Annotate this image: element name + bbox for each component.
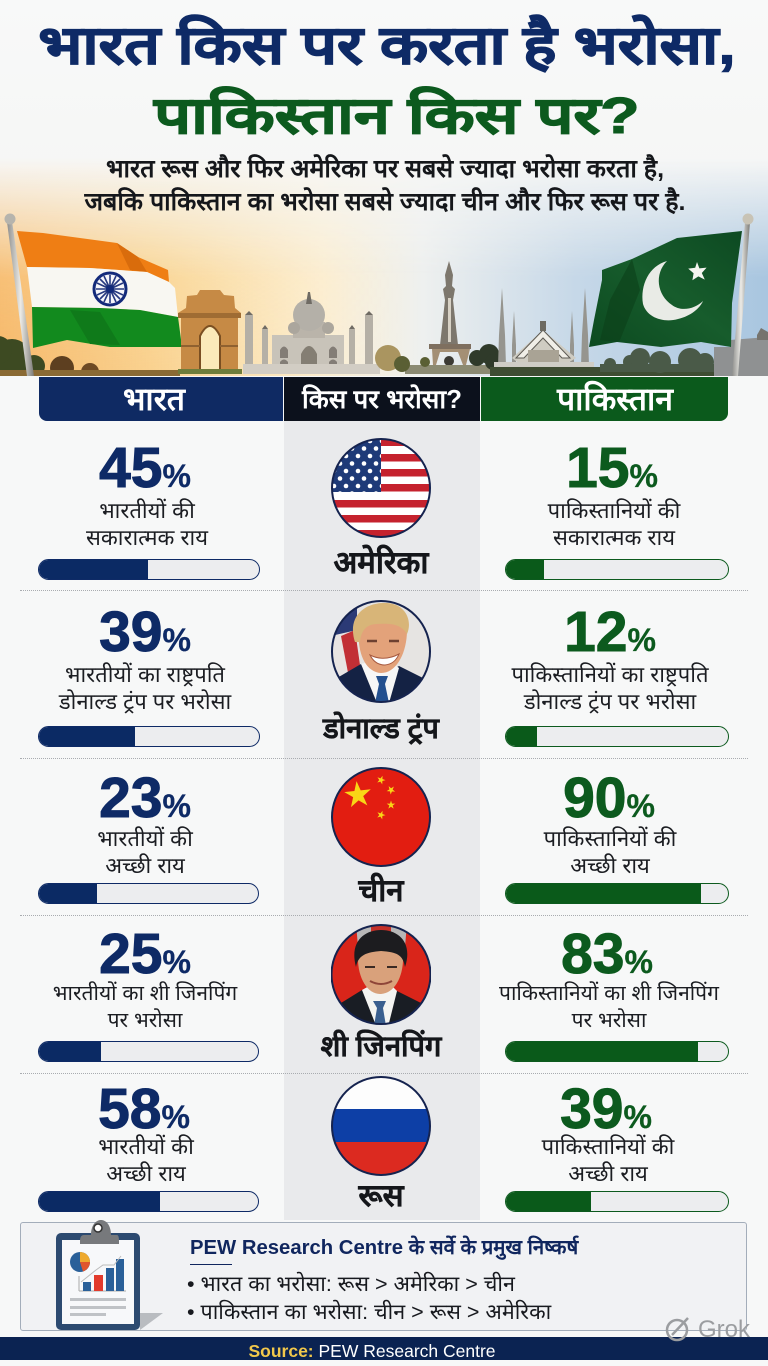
title line 2: पाकिस्तान किस पर? bbox=[154, 87, 640, 144]
findings bullets: • पाकिस्तान का भरोसा: चीन > रूस > अमेरिका bbox=[187, 1300, 551, 1324]
row 1: America bbox=[38, 436, 729, 580]
India label bbox=[58, 662, 232, 714]
source footer bbox=[0, 1337, 768, 1360]
Pakistan label: पाकिस्तानियों का राष्ट्रपति bbox=[511, 662, 709, 687]
flag: India bbox=[17, 231, 182, 348]
icon: China flag bbox=[331, 767, 431, 867]
findings bullets: • भारत का भरोसा: रूस > अमेरिका > चीन bbox=[187, 1272, 515, 1296]
person name: डोनाल्ड ट्रंप bbox=[323, 713, 439, 745]
Pakistan label: डोनाल्ड ट्रंप पर भरोसा bbox=[524, 689, 696, 714]
findings bullets bbox=[187, 1272, 552, 1324]
icon: Russia flag bbox=[331, 1076, 431, 1176]
India label: भारतीयों का शी जिनपिंग bbox=[53, 982, 237, 1005]
India 45 percent: 45% bbox=[99, 436, 191, 500]
Pakistan progress bar bbox=[505, 726, 729, 747]
Pakistan label: पाकिस्तानियों की bbox=[542, 1134, 674, 1159]
India progress bar bbox=[38, 559, 260, 580]
Pakistan label bbox=[542, 1134, 675, 1186]
Minar-e-Pakistan bbox=[405, 261, 525, 374]
Pakistan label: अच्छी राय bbox=[568, 1161, 648, 1186]
source footer: Source: PEW Research Centre bbox=[248, 1341, 496, 1361]
header: trust in whom bbox=[284, 377, 480, 421]
Pakistan label: पर भरोसा bbox=[572, 1009, 646, 1032]
person name: शी जिनपिंग bbox=[321, 1031, 441, 1063]
Pakistan label bbox=[511, 662, 709, 714]
India Gate bbox=[178, 290, 242, 374]
country name: रूस bbox=[358, 1178, 404, 1213]
Pakistan label: सकारात्मक राय bbox=[553, 525, 675, 550]
subtitle: भारत रूस और फिर अमेरिका पर सबसे ज्यादा भरोसा करता है, bbox=[106, 155, 664, 183]
India label: अच्छी राय bbox=[106, 1161, 186, 1186]
watermark: Grok: Grok bbox=[698, 1316, 750, 1343]
title line 1: भारत किस पर करता है भरोसा, bbox=[38, 16, 736, 76]
portrait: Xi Jinping bbox=[331, 924, 431, 1025]
watermark: Grok bbox=[666, 1316, 750, 1343]
Pakistan label: पाकिस्तानियों की bbox=[548, 498, 680, 523]
India label: भारतीयों का राष्ट्रपति bbox=[65, 662, 225, 687]
subtitle bbox=[84, 154, 685, 216]
India label: सकारात्मक राय bbox=[86, 525, 208, 550]
Pakistan progress bar bbox=[505, 559, 729, 580]
Pakistan label bbox=[548, 498, 681, 550]
India 23 percent: 23% bbox=[99, 766, 191, 830]
row 3: China bbox=[38, 766, 729, 908]
Pakistan 15 percent: 15% bbox=[566, 436, 658, 500]
Pakistan 83 percent: 83% bbox=[561, 922, 653, 986]
India label: भारतीयों की bbox=[99, 498, 195, 523]
Pakistan progress bar bbox=[505, 1191, 729, 1212]
India label: डोनाल्ड ट्रंप पर भरोसा bbox=[59, 689, 231, 714]
country name: चीन bbox=[359, 873, 403, 908]
Faisal Mosque bbox=[490, 288, 768, 376]
header: Pakistan: पाकिस्तान bbox=[557, 381, 673, 417]
India label: अच्छी राय bbox=[105, 853, 185, 878]
trees mid bbox=[375, 344, 501, 372]
header: trust in whom: किस पर भरोसा? bbox=[302, 384, 462, 414]
India progress bar bbox=[38, 726, 260, 747]
flag: Pakistan bbox=[589, 231, 742, 347]
India label: भारतीयों की bbox=[97, 826, 193, 851]
header: India bbox=[39, 377, 283, 421]
India label bbox=[53, 981, 238, 1032]
Pakistan label bbox=[544, 826, 677, 878]
header: Pakistan bbox=[481, 377, 728, 421]
Pakistan 12 percent: 12% bbox=[564, 600, 656, 664]
hero banner: sky, flags and monuments bbox=[0, 163, 768, 376]
Pakistan label: पाकिस्तानियों का शी जिनपिंग bbox=[499, 982, 719, 1005]
India label: भारतीयों की bbox=[98, 1134, 194, 1159]
Pakistan progress bar bbox=[505, 883, 729, 904]
Pakistan 90 percent: 90% bbox=[563, 766, 655, 830]
Taj Mahal bbox=[243, 292, 380, 374]
left trees bbox=[0, 336, 180, 381]
header: India: भारत bbox=[123, 381, 185, 417]
Pakistan label: अच्छी राय bbox=[570, 853, 650, 878]
country name: अमेरिका bbox=[334, 545, 428, 580]
portrait: Donald Trump bbox=[331, 600, 431, 703]
India progress bar bbox=[38, 1191, 259, 1212]
India progress bar bbox=[38, 883, 259, 904]
Pakistan progress bar bbox=[505, 1041, 729, 1062]
India label bbox=[98, 1134, 194, 1186]
India label: पर भरोसा bbox=[108, 1009, 182, 1032]
India progress bar bbox=[38, 1041, 259, 1062]
findings heading: PEW Research Centre के सर्वे के प्रमुख निष्कर्ष bbox=[190, 1237, 578, 1259]
flag poles bbox=[4, 214, 754, 376]
row 2: Donald Trump bbox=[38, 600, 729, 747]
row 4: Xi Jinping bbox=[38, 922, 729, 1063]
India 58 percent: 58% bbox=[98, 1077, 190, 1141]
India 25 percent: 25% bbox=[99, 922, 191, 986]
Pakistan label: पाकिस्तानियों की bbox=[544, 826, 676, 851]
Pakistan label bbox=[499, 981, 720, 1032]
India label bbox=[97, 826, 194, 878]
trees right and building bbox=[600, 348, 720, 373]
panel: key findings bbox=[20, 1222, 747, 1331]
icon: clipboard with charts bbox=[56, 1220, 163, 1330]
Pakistan 39 percent: 39% bbox=[560, 1077, 652, 1141]
India label bbox=[86, 498, 208, 550]
center column background bbox=[284, 421, 480, 1220]
subtitle: जबकि पाकिस्तान का भरोसा सबसे ज्यादा चीन और फिर रूस पर है. bbox=[85, 188, 685, 216]
icon: US flag bbox=[331, 438, 431, 538]
row 5: Russia bbox=[38, 1076, 729, 1213]
India 39 percent: 39% bbox=[99, 600, 191, 664]
